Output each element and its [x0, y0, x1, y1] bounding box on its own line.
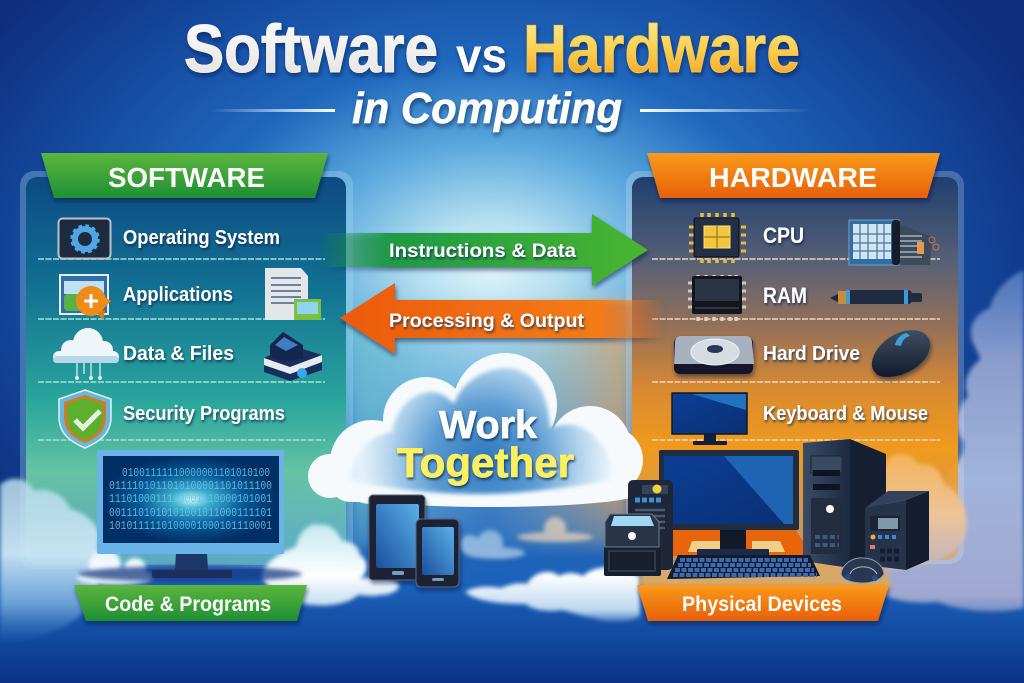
icon: data blocks	[264, 332, 322, 381]
cloud text: work: Work	[439, 404, 537, 447]
subtitle: in Computing	[352, 84, 622, 133]
sandy desk surface	[640, 555, 892, 588]
binary code lines: 0111101011010100001101011100	[109, 479, 272, 493]
cloud text: together: Together	[397, 439, 574, 486]
keyboard	[667, 555, 820, 579]
hardware header banner	[647, 153, 940, 198]
icon: ram chip	[688, 275, 746, 321]
label: cpu: CPU	[763, 223, 804, 248]
physical devices group	[604, 439, 929, 588]
binary code lines: 1110100011110001110000101001	[109, 492, 272, 506]
icon: document	[265, 268, 321, 320]
software header banner: SOFTWARE	[108, 162, 265, 193]
banner: physical devices: Physical Devices	[682, 593, 842, 616]
arrow label: instructions and data: Instructions & Data	[389, 241, 576, 262]
icon: tablet and phone	[369, 495, 459, 587]
title word: vs: vs	[456, 30, 507, 83]
panel: software	[20, 153, 353, 569]
desktop tower	[803, 439, 886, 568]
small mouse	[841, 558, 884, 583]
icon: operating system gear	[58, 218, 110, 258]
large monitor	[659, 450, 799, 556]
foreground clouds left	[0, 479, 399, 643]
banner: code and programs	[74, 585, 307, 621]
background clouds right	[874, 270, 1024, 611]
icon: small monitor	[672, 393, 747, 445]
icon: hard drive	[674, 336, 754, 374]
icon: data cloud	[53, 328, 119, 380]
icon: mouse	[872, 330, 930, 377]
panel: hardware	[626, 153, 964, 564]
binary code lines: 01001111110000001101010100	[122, 466, 270, 480]
foreground clouds centre	[460, 517, 640, 622]
icon: applications window	[60, 275, 111, 320]
foreground clouds right	[864, 454, 967, 571]
software header banner	[41, 153, 328, 198]
icon: security shield	[59, 390, 111, 448]
icon: cpu chip	[689, 213, 746, 263]
binary code lines	[109, 466, 272, 533]
banner: code and programs: Code & Programs	[105, 593, 271, 616]
label: ram: RAM	[763, 283, 807, 308]
stacked boxes	[604, 514, 661, 576]
title word: Hardware: Hardware	[523, 11, 800, 87]
arrow label: processing and output: Processing & Output	[389, 311, 585, 332]
arrow: instructions and data	[318, 214, 648, 286]
hardware header banner: HARDWARE	[709, 162, 877, 193]
label: applications: Applications	[123, 284, 233, 306]
binary code lines: 1010111110100001000101110001	[109, 519, 272, 533]
title word: Software: Software	[184, 11, 438, 87]
binary code lines: 0011101010101001011000111101	[109, 506, 272, 520]
orange desk	[660, 530, 812, 556]
banner: physical devices	[637, 585, 889, 621]
arrow: processing and output	[340, 283, 665, 354]
small tower	[865, 491, 929, 570]
monitor: binary code	[78, 450, 302, 582]
icon: pen drive	[830, 290, 922, 304]
label: security programs: Security Programs	[123, 403, 285, 425]
label: hard drive: Hard Drive	[763, 343, 860, 365]
icon: processor module	[849, 220, 939, 265]
label: keyboard and mouse: Keyboard & Mouse	[763, 403, 928, 425]
handheld device	[628, 480, 673, 570]
label: operating system: Operating System	[123, 227, 280, 249]
label: data and files: Data & Files	[123, 343, 234, 365]
title	[184, 11, 800, 133]
central cloud: work together	[308, 353, 643, 507]
